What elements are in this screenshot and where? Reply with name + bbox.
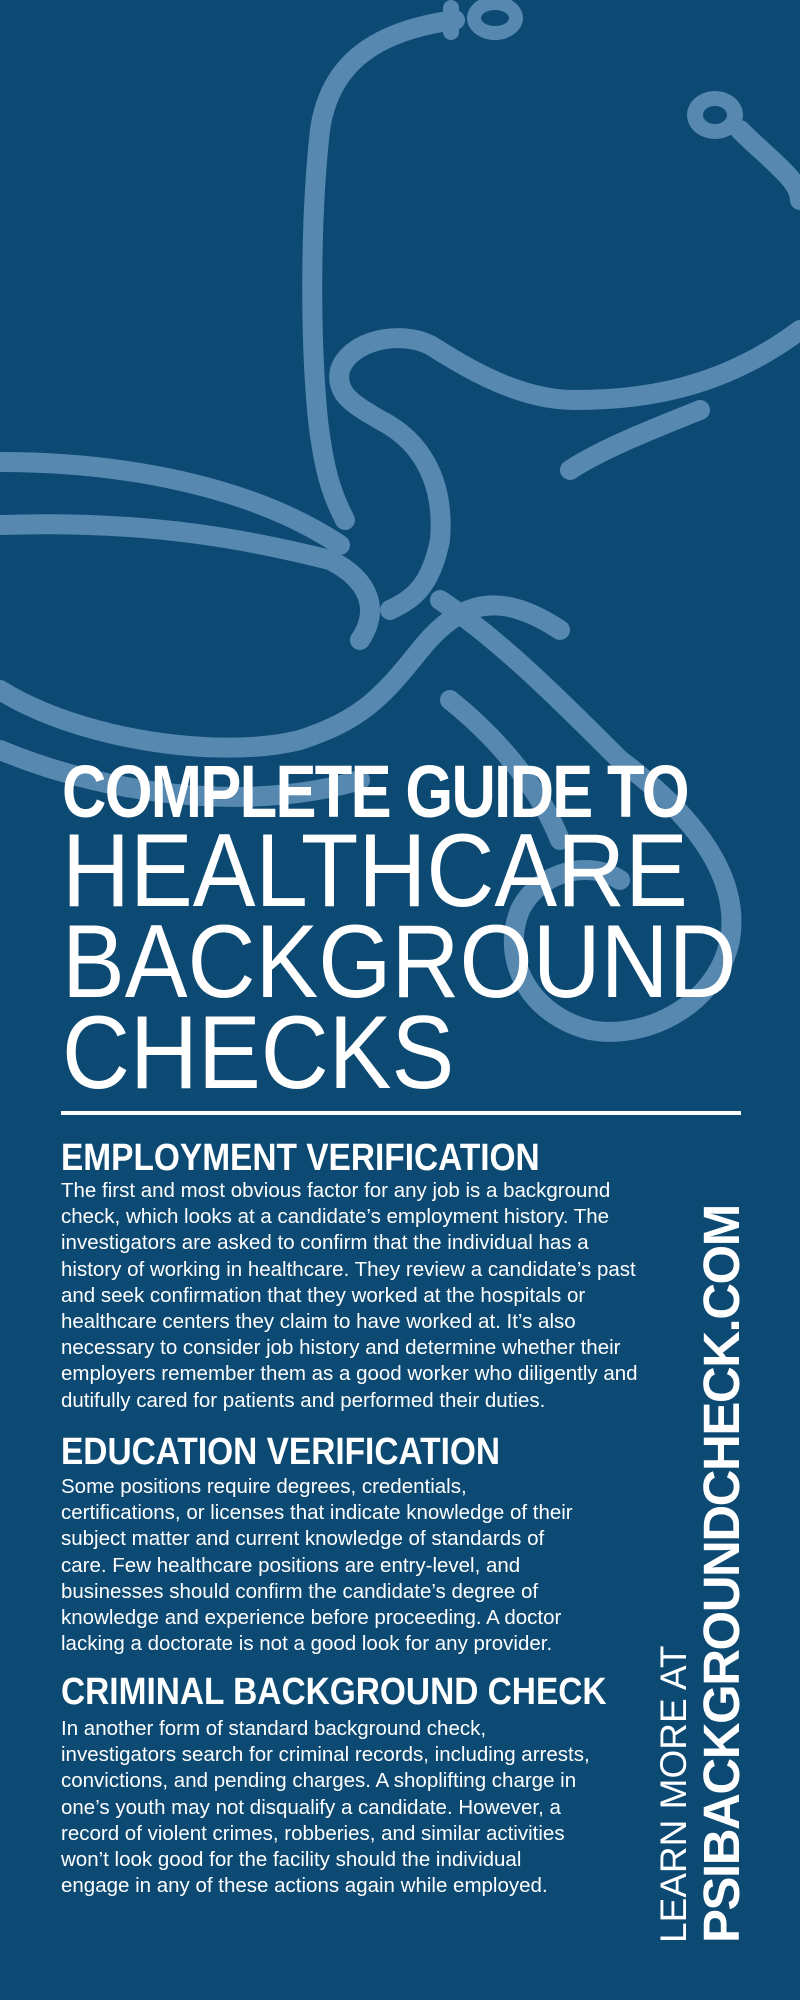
- body: [61, 1179, 638, 1412]
- stethoscope illustration: [0, 0, 800, 1042]
- body: necessary to consider job history and determine whether their: [61, 1336, 620, 1359]
- section: criminal background check: record of violent crimes, robberies, and similar activities: [61, 1822, 565, 1845]
- section: education verification: EDUCATION VERIFICATION: [61, 1431, 500, 1473]
- vertical call to action: PSIBACKGROUNDCHECK.COM: [693, 1205, 750, 1943]
- body: check, which looks at a candidate’s employment history. The: [61, 1205, 609, 1228]
- body: investigators are asked to confirm that the individual has a: [61, 1231, 589, 1254]
- section: criminal background check: engage in any of these actions again while employed.: [61, 1874, 548, 1897]
- title: COMPLETE GUIDE TO: [62, 750, 688, 833]
- section: education verification: certifications, or licenses that indicate knowledge of their: [61, 1501, 573, 1524]
- section: criminal background check: one’s youth may not disqualify a candidate. However, a: [61, 1796, 561, 1819]
- section: education verification: businesses should confirm the candidate’s degree of: [61, 1580, 538, 1603]
- section: criminal background check: investigators search for criminal records, including arrests,: [61, 1743, 590, 1766]
- body: and seek confirmation that they worked at the hospitals or: [61, 1284, 585, 1307]
- title: HEALTHCARE: [62, 813, 688, 929]
- section: employment verification: [61, 1137, 638, 1412]
- section: criminal background check: [61, 1671, 607, 1897]
- body: employers remember them as a good worker who diligently and: [61, 1362, 638, 1385]
- title: CHECKS: [62, 995, 454, 1111]
- section: criminal background check: CRIMINAL BACKGROUND CHECK: [61, 1671, 607, 1713]
- section: education verification: subject matter and current knowledge of standards of: [61, 1527, 544, 1550]
- body: dutifully cared for patients and performed their duties.: [61, 1389, 545, 1412]
- section: education verification: lacking a doctorate is not a good look for any provider.: [61, 1632, 552, 1655]
- vertical call to action: LEARN MORE AT: [653, 1646, 694, 1943]
- section: education verification: Some positions require degrees, credentials,: [61, 1475, 467, 1498]
- vertical call to action: [653, 1205, 750, 1943]
- title: [62, 750, 737, 1111]
- section: education verification: knowledge and experience before proceeding. A doctor: [61, 1606, 561, 1629]
- section: criminal background check: In another form of standard background check,: [61, 1717, 486, 1740]
- title: BACKGROUND: [62, 904, 737, 1020]
- section: criminal background check: convictions, and pending charges. A shoplifting charge in: [61, 1769, 576, 1792]
- body: The first and most obvious factor for any job is a background: [61, 1179, 610, 1202]
- body: history of working in healthcare. They review a candidate’s past: [61, 1258, 636, 1281]
- heading: EMPLOYMENT VERIFICATION: [61, 1137, 540, 1179]
- section: education verification: [61, 1431, 573, 1655]
- body: healthcare centers they claim to have worked at. It’s also: [61, 1310, 576, 1333]
- section: criminal background check: won’t look good for the facility should the individual: [61, 1848, 521, 1871]
- section: education verification: care. Few healthcare positions are entry-level, and: [61, 1554, 520, 1577]
